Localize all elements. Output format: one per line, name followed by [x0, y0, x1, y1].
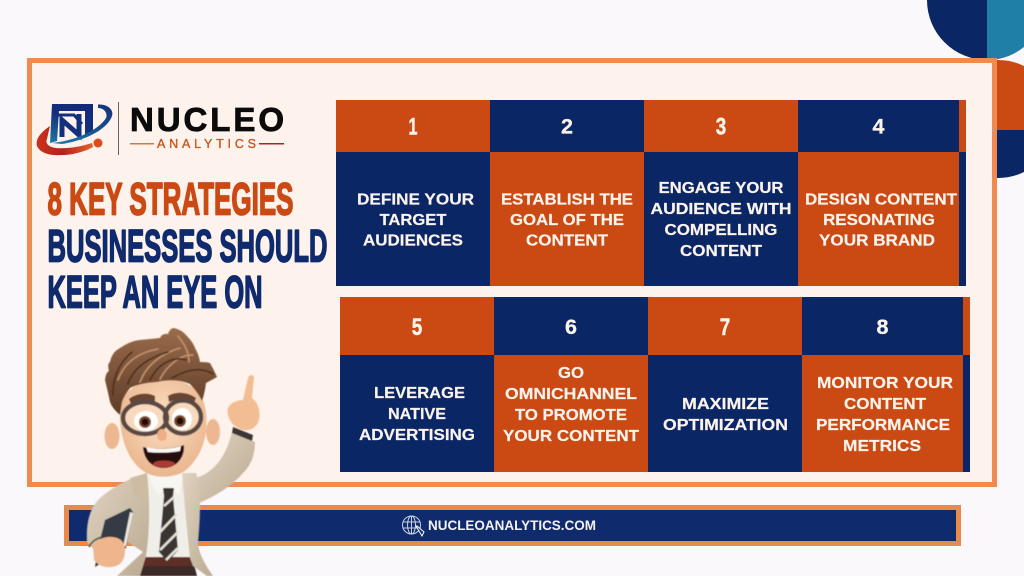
strategy 8: METRICS: [843, 438, 921, 455]
footer bar: [66, 508, 958, 544]
strategy 6: OMNICHANNEL: [505, 386, 637, 403]
book: [95, 508, 133, 567]
strategy 2: GOAL OF THE: [510, 212, 624, 229]
mouth: [143, 445, 184, 468]
glasses: [123, 400, 201, 434]
shirt cuff: [232, 427, 253, 441]
strategy 3: COMPELLING: [664, 222, 778, 239]
strategy 4: 4: [873, 114, 885, 138]
strategy 3: [650, 114, 792, 260]
logo icon: [37, 104, 112, 155]
decorative circle: top right: [927, 0, 1024, 60]
pointing hand: [227, 375, 260, 430]
strategy 1: TARGET: [380, 212, 447, 229]
title line 1: 8 KEY STRATEGIES: [48, 174, 294, 224]
strategy 6: [503, 315, 640, 445]
decorative circle: right side: [997, 60, 1024, 178]
character: cheerful businessman pointing up: [87, 328, 260, 576]
strategy 8: [816, 315, 953, 455]
lenses: [124, 402, 200, 433]
face: [120, 379, 207, 477]
strategy 8: MONITOR YOUR: [817, 375, 953, 392]
strategy 2: CONTENT: [526, 232, 609, 250]
strategy 1: [357, 114, 474, 250]
strategy 2: [501, 114, 633, 250]
nose: [157, 429, 167, 441]
strategy 4: YOUR BRAND: [819, 232, 935, 250]
strategy 2: 2: [561, 114, 573, 138]
title: [48, 174, 328, 318]
strategy 3: AUDIENCE WITH: [650, 201, 792, 218]
trousers: [132, 560, 197, 576]
ears: [104, 419, 220, 449]
strategy 6: YOUR CONTENT: [503, 428, 640, 445]
title line 2: BUSINESSES SHOULD: [48, 220, 328, 272]
strategy 2: ESTABLISH THE: [501, 192, 633, 208]
strategy 7: [663, 314, 788, 434]
strategy 6: 6: [565, 315, 577, 339]
strategy 5: [359, 314, 475, 444]
strategy 8: CONTENT: [844, 396, 927, 413]
hair: [105, 328, 217, 415]
strategy 7: 7: [720, 314, 730, 341]
strategy 7: MAXIMIZE: [682, 396, 769, 413]
logo divider: [118, 102, 119, 155]
tie: [159, 488, 178, 562]
strategy 5: ADVERTISING: [359, 427, 475, 444]
eyes: [134, 408, 192, 431]
strategy 4: DESIGN CONTENT: [805, 192, 958, 208]
strategy 7: OPTIMIZATION: [663, 417, 788, 434]
table cell backgrounds: [336, 100, 966, 286]
strategy 8: 8: [877, 315, 889, 339]
icon: globe with cursor: [402, 516, 424, 536]
main panel: [30, 60, 994, 484]
strategy 1: 1: [408, 114, 418, 140]
strategy 5: LEVERAGE: [374, 385, 465, 402]
strategy 6: GO: [558, 365, 584, 382]
belt: [142, 555, 192, 566]
jacket right side: [182, 473, 213, 576]
strategy 8: PERFORMANCE: [816, 417, 950, 434]
strategy 3: CONTENT: [680, 243, 763, 260]
logo: Nucleo Analytics: [37, 101, 284, 155]
eyebrows: [129, 393, 196, 404]
hand holding book: [93, 537, 125, 567]
logo wordmark: NUCLEO: [130, 101, 284, 138]
left lapel: [130, 473, 148, 500]
strategy table: row one: [336, 100, 966, 286]
strategy 5: NATIVE: [388, 406, 446, 423]
logo subtitle: ANALYTICS: [157, 137, 256, 151]
raised arm: [195, 432, 255, 503]
strategy 5: 5: [412, 314, 422, 341]
strategy 1: AUDIENCES: [363, 232, 463, 250]
title line 3: KEEP AN EYE ON: [48, 266, 262, 318]
strategy 6: TO PROMOTE: [515, 407, 627, 424]
website address: NUCLEOANALYTICS.COM: [428, 518, 596, 533]
table cell backgrounds: [340, 297, 970, 472]
strategy 3: 3: [716, 114, 726, 140]
strategy table: row two: [340, 297, 970, 472]
strategy 4: RESONATING: [823, 212, 935, 229]
shirt: [143, 476, 190, 557]
strategy 1: DEFINE YOUR: [357, 192, 474, 208]
cuff line: [89, 537, 103, 547]
jacket left side: [87, 473, 149, 576]
strategy 4: [805, 114, 958, 250]
strategy 3: ENGAGE YOUR: [658, 180, 784, 197]
hair strands: [113, 336, 213, 395]
shirt collar: [147, 474, 183, 495]
